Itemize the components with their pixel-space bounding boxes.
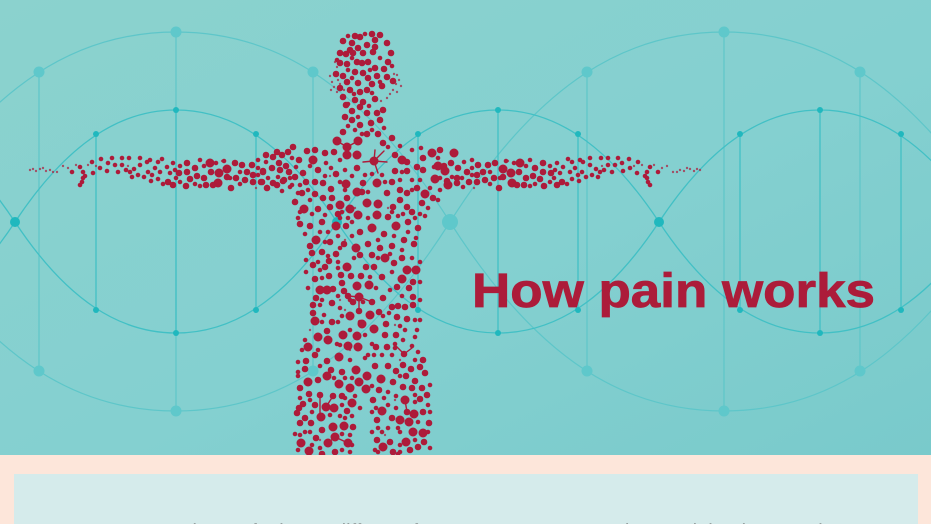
large helix strands and rungs: [0, 32, 931, 411]
medium dots: [168, 34, 562, 454]
extra fill dots for arm and body density: [118, 158, 612, 452]
small dots: [72, 34, 658, 454]
small helix nodes: [10, 107, 904, 336]
tiny speckle dots at ears and fingertips: [30, 62, 700, 440]
page: peach lower band: [0, 455, 931, 524]
panel: pale blue text box: [14, 474, 918, 524]
largest dots: [210, 141, 520, 451]
title: How pain works: [472, 265, 875, 318]
DNA helix background: [0, 26, 931, 416]
large helix nodes: [34, 26, 866, 416]
human figure made of red dots: [30, 34, 700, 454]
small helix strands and rungs: [0, 110, 931, 333]
connecting strokes between dots: [320, 141, 412, 443]
